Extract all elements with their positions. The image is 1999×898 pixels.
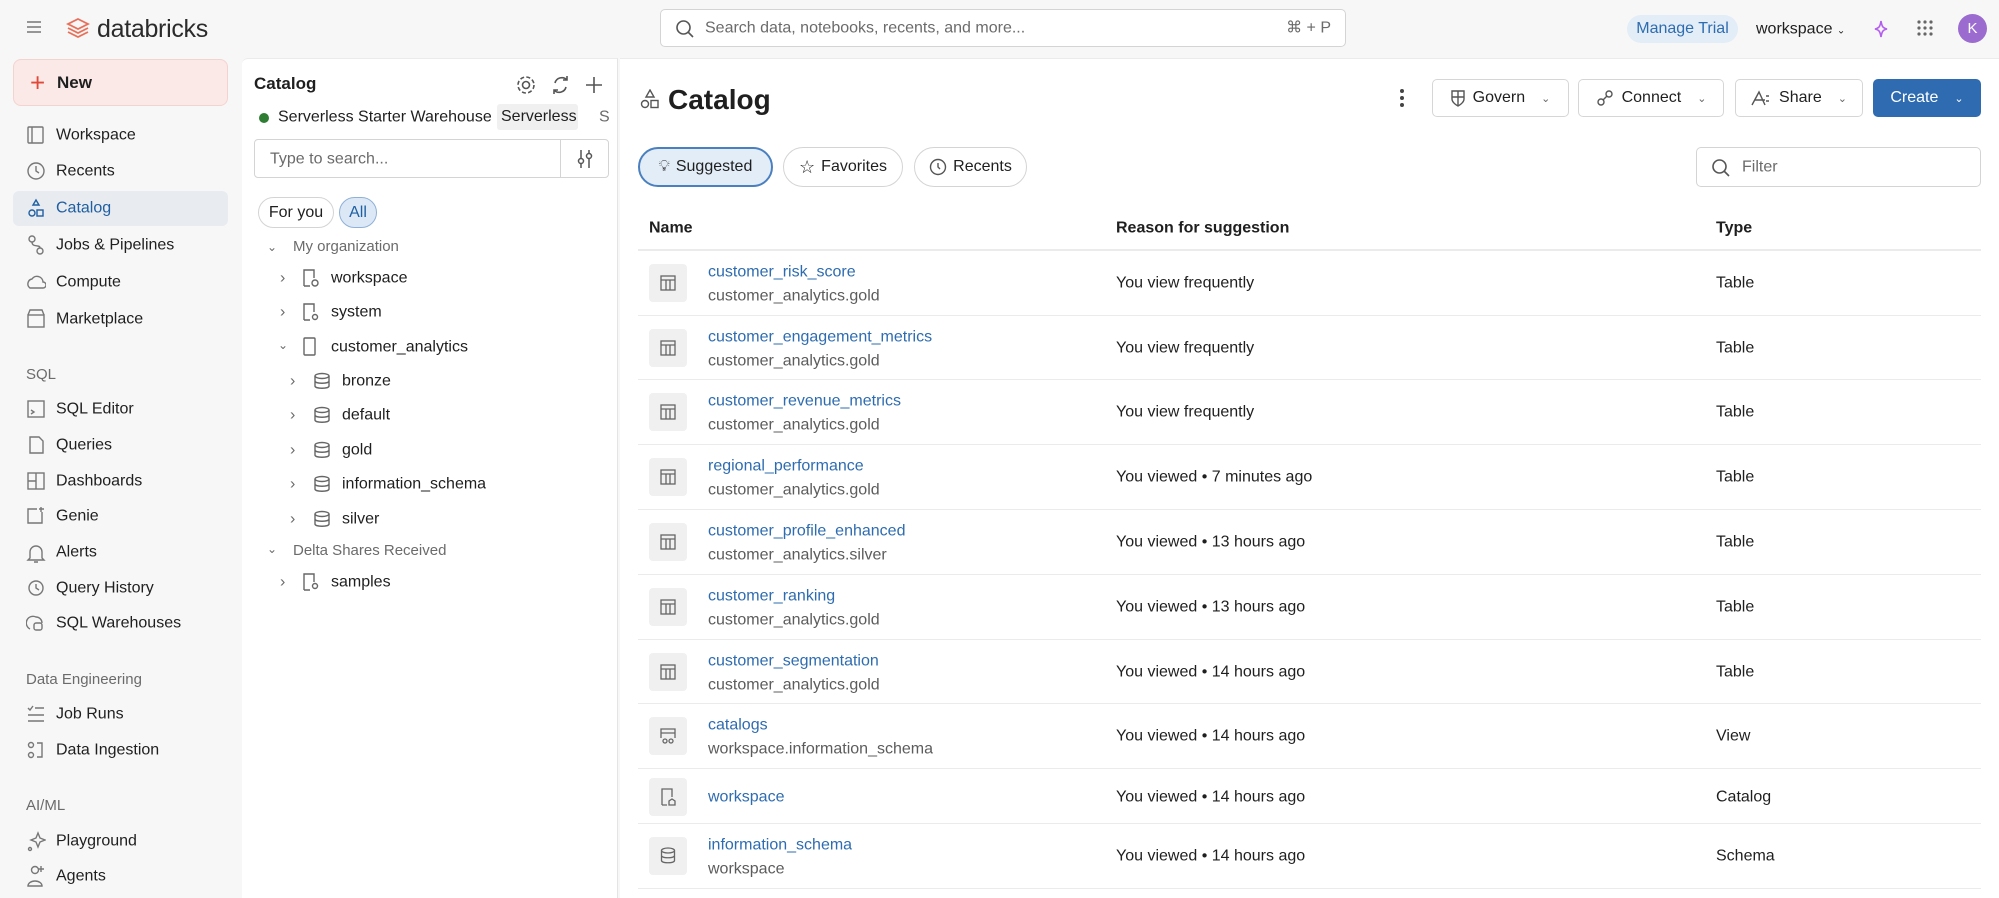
panel: catalog browser: All	[349, 204, 367, 220]
tabs: 💡︎	[659, 158, 670, 175]
action buttons: ⌄	[1541, 92, 1550, 104]
row: workspace	[638, 769, 1981, 824]
row: customer_segmentation: customer_segmentation	[708, 652, 879, 669]
sidebar	[13, 59, 228, 887]
new button: New	[57, 73, 92, 92]
manage trial pill	[1627, 15, 1738, 43]
row: information_schema: information_schema	[708, 836, 852, 853]
row: customer_engagement_metrics: Table	[1716, 339, 1754, 356]
row: regional_performance: Table	[1716, 468, 1754, 485]
manage trial pill: Manage Trial	[1636, 20, 1729, 37]
nav items: Query History	[56, 579, 154, 596]
warehouse status	[259, 104, 610, 130]
workspace selector: workspace ⌄	[1756, 20, 1845, 37]
nav items: Playground	[56, 832, 137, 849]
nav items: Catalog	[56, 199, 111, 216]
tree: samples	[331, 573, 391, 590]
row: customer_risk_score: customer_analytics.gold	[708, 287, 880, 304]
tree: ⌄	[278, 338, 288, 352]
row: customer_ranking: Table	[1716, 598, 1754, 615]
tabs	[638, 147, 1027, 187]
icon: sparkle	[1874, 20, 1888, 38]
nav items: SQL Editor	[56, 400, 134, 417]
warehouse status: Serverless Starter Warehouse	[278, 108, 492, 125]
nav items: Data Engineering	[26, 671, 142, 688]
row: customer_profile_enhanced: Table	[1716, 533, 1754, 550]
tree: ›	[290, 475, 295, 492]
tree	[267, 238, 486, 591]
row: customer_engagement_metrics: customer_engagement_metrics	[708, 328, 932, 345]
action buttons: ⌄	[1954, 92, 1964, 104]
nav items: Agents	[56, 867, 106, 884]
nav items	[26, 126, 181, 884]
table header: Type	[1716, 219, 1752, 236]
nav items: Queries	[56, 436, 112, 453]
row: customer_segmentation: Table	[1716, 663, 1754, 680]
action buttons: Share	[1779, 89, 1822, 106]
nav items: Workspace	[56, 126, 136, 143]
tree: ›	[290, 372, 295, 389]
row: regional_performance	[638, 445, 1981, 510]
tabs: ☆	[799, 156, 815, 176]
row: information_schema: Schema	[1716, 847, 1775, 864]
row: regional_performance: You viewed • 7 minutes ago	[1116, 468, 1312, 485]
row: customer_engagement_metrics: customer_analytics.gold	[708, 352, 880, 369]
row: customer_profile_enhanced: You viewed • 13 hours ago	[1116, 533, 1305, 550]
nav icons	[26, 126, 46, 887]
panel header icons	[517, 76, 602, 94]
row: customer_ranking: customer_analytics.gold	[708, 611, 880, 628]
action buttons: Connect	[1622, 89, 1681, 106]
nav items: Genie	[56, 507, 99, 524]
tree: My organization	[293, 238, 399, 255]
row: customer_revenue_metrics: Table	[1716, 403, 1754, 420]
row: customer_engagement_metrics: You view frequently	[1116, 339, 1254, 356]
row: customer_ranking: You viewed • 13 hours ago	[1116, 598, 1305, 615]
row: customer_ranking: customer_ranking	[708, 587, 835, 604]
row: customer_risk_score	[638, 251, 1981, 316]
filter box: Filter	[1742, 158, 1778, 175]
row: customer_profile_enhanced: customer_profile_enhanced	[708, 522, 905, 539]
nav items: Alerts	[56, 543, 97, 560]
nav items: Jobs & Pipelines	[56, 236, 174, 253]
row: customer_risk_score: customer_risk_score	[708, 263, 856, 280]
filter box	[1696, 147, 1981, 187]
row: catalogs: workspace.information_schema	[708, 740, 933, 757]
filter pills	[258, 197, 334, 228]
row: customer_risk_score: You view frequently	[1116, 274, 1254, 291]
tree: ⌄	[267, 240, 277, 254]
warehouse status: Serverless	[501, 108, 577, 125]
main panel	[620, 58, 1999, 898]
tabs: Suggested	[676, 158, 752, 175]
row: regional_performance: customer_analytics.gold	[708, 481, 880, 498]
row: customer_revenue_metrics	[638, 380, 1981, 445]
row: customer_revenue_metrics: customer_revenue_metrics	[708, 392, 901, 409]
tree: ›	[280, 573, 285, 590]
nav items: Dashboards	[56, 472, 142, 489]
row: information_schema: workspace	[708, 860, 784, 877]
warehouse status: S	[599, 108, 610, 125]
tree: ›	[290, 406, 295, 423]
filter pills: For you	[269, 204, 323, 220]
tree search box: Type to search...	[270, 150, 388, 167]
nav items: Compute	[56, 273, 121, 290]
action buttons: Create	[1890, 89, 1938, 106]
tabs: Favorites	[821, 158, 887, 175]
tree: customer_analytics	[331, 338, 468, 355]
tree: Delta Shares Received	[293, 542, 446, 559]
icon: hamburger menu	[27, 21, 41, 33]
table header: Name	[649, 219, 693, 236]
panel heading: Catalog	[254, 74, 316, 93]
row: customer_ranking	[638, 575, 1981, 640]
avatar	[1958, 14, 1987, 43]
tree: workspace	[331, 269, 407, 286]
row: customer_revenue_metrics: customer_analytics.gold	[708, 416, 880, 433]
tree: system	[331, 303, 382, 320]
row: customer_revenue_metrics: You view frequently	[1116, 403, 1254, 420]
row: workspace: You viewed • 14 hours ago	[1116, 788, 1305, 805]
row: catalogs	[638, 704, 1981, 769]
row: workspace: Catalog	[1716, 788, 1771, 805]
tree: gold	[342, 441, 372, 458]
action buttons: Govern	[1473, 89, 1525, 106]
row: workspace: workspace	[708, 788, 784, 805]
new button	[13, 59, 228, 106]
row: catalogs: View	[1716, 727, 1750, 744]
action buttons: ⌄	[1838, 92, 1847, 104]
nav items: Marketplace	[56, 310, 143, 327]
table header: Reason for suggestion	[1116, 219, 1289, 236]
nav items: Recents	[56, 162, 115, 179]
nav items: SQL	[26, 366, 56, 383]
row: catalogs: catalogs	[708, 716, 768, 733]
new button: +	[30, 67, 45, 97]
row: catalogs: You viewed • 14 hours ago	[1116, 727, 1305, 744]
row: customer_segmentation: customer_analytics.gold	[708, 676, 880, 693]
top bar	[27, 9, 1987, 47]
global search box: Search data, notebooks, recents, and more...	[705, 19, 1025, 36]
action buttons: ⌄	[1697, 92, 1706, 104]
tree: information_schema	[342, 475, 486, 492]
tree: bronze	[342, 372, 391, 389]
row: information_schema: You viewed • 14 hours ago	[1116, 847, 1305, 864]
tree: ⌄	[267, 542, 277, 556]
tree: default	[342, 406, 390, 423]
row: regional_performance: regional_performance	[708, 457, 864, 474]
tree: ›	[290, 510, 295, 527]
tree: ›	[280, 303, 285, 320]
action buttons	[1432, 79, 1981, 117]
global search box: ⌘ + P	[1286, 19, 1331, 36]
avatar: K	[1967, 20, 1978, 37]
tree: ›	[280, 269, 285, 286]
row: customer_risk_score: Table	[1716, 274, 1754, 291]
tree: ›	[290, 441, 295, 458]
table header	[638, 205, 1981, 251]
row: customer_engagement_metrics	[638, 316, 1981, 380]
logo: databricks	[97, 15, 208, 43]
table	[638, 219, 1981, 251]
global search box	[660, 9, 1346, 47]
tree: silver	[342, 510, 379, 527]
nav items: Job Runs	[56, 705, 124, 722]
icon: kebab menu	[1400, 89, 1404, 107]
nav: catalog highlight	[13, 191, 228, 226]
tree search box	[254, 139, 609, 178]
tabs: Recents	[953, 158, 1012, 175]
row: customer_segmentation: You viewed • 14 hours ago	[1116, 663, 1305, 680]
page heading: Catalog	[668, 84, 771, 115]
nav items: SQL Warehouses	[56, 614, 181, 631]
nav items: AI/ML	[26, 797, 65, 814]
nav items: Data Ingestion	[56, 741, 159, 758]
panel: catalog browser	[242, 58, 618, 898]
row: customer_profile_enhanced	[638, 510, 1981, 575]
icon: apps grid	[1917, 20, 1933, 36]
row: customer_profile_enhanced: customer_analytics.silver	[708, 546, 887, 563]
row: information_schema	[638, 824, 1981, 889]
row: customer_segmentation	[638, 640, 1981, 704]
